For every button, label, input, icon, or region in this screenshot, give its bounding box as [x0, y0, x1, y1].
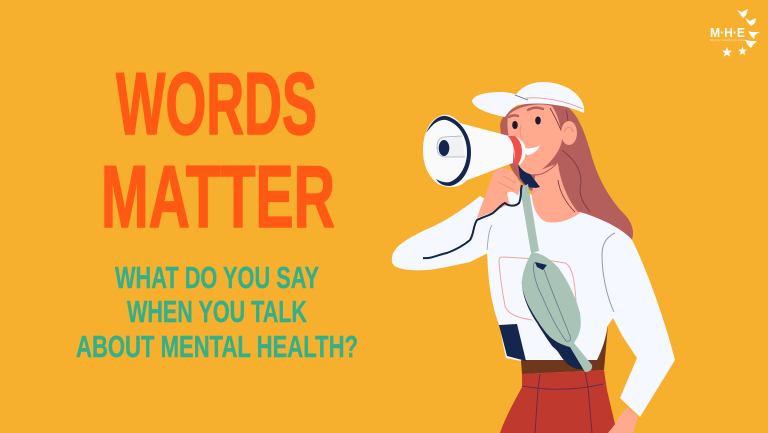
logo: MHE: Mental Health Europe — [710, 38, 746, 42]
left sleeve — [392, 196, 505, 270]
subtitle — [76, 260, 358, 364]
bag strap — [520, 184, 539, 253]
logo: MHE: M·H·E — [710, 26, 745, 40]
chest crease — [487, 225, 492, 250]
title: words matter — [101, 54, 335, 246]
right sleeve — [602, 230, 675, 417]
belt — [521, 325, 608, 374]
subtitle: ABOUT MENTAL HEALTH? — [76, 329, 358, 364]
cap — [472, 82, 584, 117]
logo: MHE — [710, 9, 760, 57]
bag shadow — [522, 280, 583, 369]
title: words matter: WORDS — [116, 54, 317, 153]
mic cable — [423, 185, 522, 258]
jaw line — [535, 162, 558, 175]
neck and chest — [532, 163, 580, 223]
thumb cuff — [507, 192, 519, 203]
left hand at hip — [608, 407, 638, 433]
smile — [523, 145, 540, 155]
subtitle: WHAT DO YOU SAY — [115, 260, 319, 295]
navy shirt patch — [499, 324, 526, 361]
pink shirt pattern — [499, 257, 576, 320]
collar — [518, 163, 540, 188]
hair back — [500, 102, 633, 246]
ear — [561, 121, 577, 145]
title: words matter: MATTER — [101, 147, 335, 246]
face — [507, 104, 562, 174]
eyes — [512, 116, 541, 129]
hand on megaphone — [477, 168, 520, 218]
subtitle: WHEN YOU TALK — [127, 294, 307, 329]
illustration: woman with megaphone — [392, 82, 675, 433]
fingers — [498, 176, 517, 196]
hair strands — [550, 108, 590, 212]
hair front — [552, 104, 604, 212]
skirt — [500, 370, 617, 433]
bum bag — [522, 252, 592, 372]
nose — [520, 125, 523, 138]
shirt torso — [487, 187, 640, 361]
eyebrows — [509, 108, 543, 117]
megaphone — [423, 115, 526, 187]
sleeve crease — [602, 233, 615, 312]
